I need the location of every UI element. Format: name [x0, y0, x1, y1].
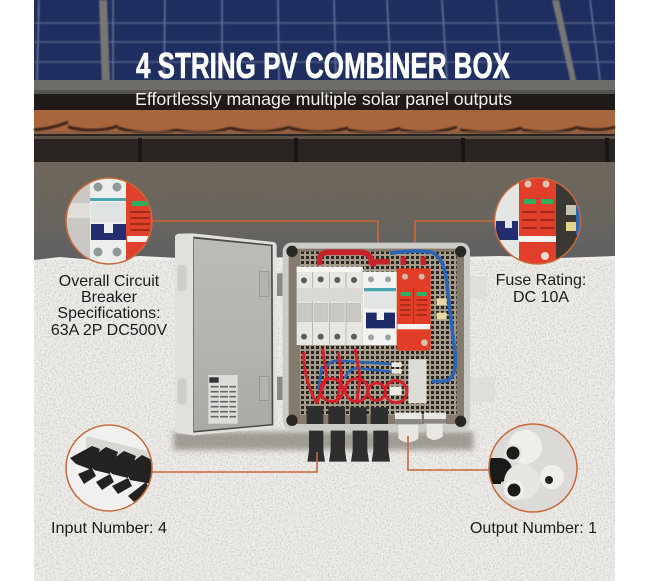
door spec label — [208, 375, 238, 424]
callout text: fuse rating: DC 10A — [513, 289, 569, 306]
callout text: circuit breaker specification: Overall Circuit — [59, 273, 160, 290]
fuse holders — [297, 267, 363, 345]
blue internal wires — [318, 361, 392, 390]
enclosure body — [283, 243, 470, 430]
terminal blocks — [437, 298, 447, 319]
callout circle: circuit breaker — [66, 178, 156, 264]
gutter — [34, 134, 615, 164]
callout text: output number: Output Number: 1 — [470, 520, 597, 537]
leader line: input connectors — [150, 452, 317, 472]
red wires and loops — [304, 348, 407, 403]
callout text: input number: Input Number: 4 — [51, 520, 167, 537]
leader line: circuit breaker — [150, 221, 378, 272]
red top wires — [319, 252, 423, 267]
callout text: circuit breaker specification: Specifications: — [57, 305, 161, 322]
callout text: circuit breaker specification: Breaker — [81, 289, 138, 306]
callout text: fuse rating: Fuse Rating: — [496, 272, 586, 289]
subtitle: Effortlessly manage multiple solar panel outputs — [135, 89, 512, 109]
red surge protector — [397, 268, 431, 351]
dark shadow under panels — [34, 94, 615, 112]
cable glands — [395, 413, 446, 442]
solar panels — [34, 0, 615, 94]
hinge pins — [277, 273, 283, 400]
callout text: circuit breaker specification: 63A 2P DC500V — [51, 322, 167, 339]
combiner box product — [173, 233, 495, 462]
right latches — [470, 276, 495, 402]
main circuit breaker — [363, 272, 397, 345]
title: 4 STRING PV COMBINER BOX — [136, 45, 510, 86]
callout circle: fuse — [494, 178, 586, 264]
wire ferrules — [390, 362, 402, 395]
roof tiles — [34, 110, 615, 136]
white stucco lower wall — [34, 256, 615, 581]
MC4 connectors — [307, 406, 390, 462]
callout text: fuse rating — [496, 272, 586, 306]
blue wire — [390, 251, 455, 381]
leader line: output gland — [408, 436, 490, 470]
open door — [175, 233, 277, 435]
grey-brown upper wall — [34, 162, 615, 260]
door hinges — [259, 272, 269, 401]
callout text: circuit breaker specification — [51, 273, 167, 339]
leader line: fuse — [415, 221, 495, 272]
white junction block — [408, 359, 427, 403]
callout circle: output glands — [488, 424, 577, 512]
callout circle: input connectors — [66, 425, 152, 511]
box shadow — [173, 432, 473, 450]
